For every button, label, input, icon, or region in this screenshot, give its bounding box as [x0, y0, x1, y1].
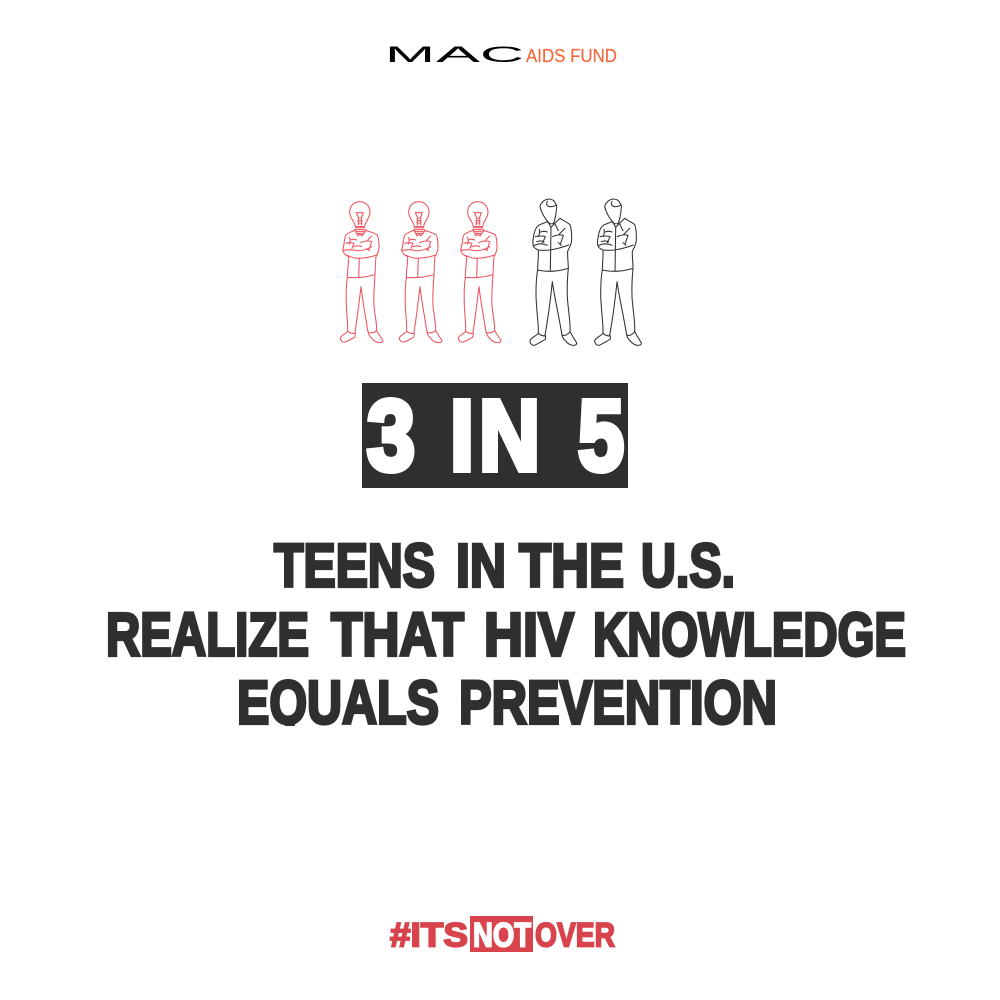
logo wordmark MAC: A — [436, 42, 481, 67]
logo wordmark MAC: M — [385, 42, 435, 67]
headline text — [108, 542, 906, 726]
stat word IN — [450, 380, 540, 492]
icon: lightbulb person 1 — [340, 202, 383, 343]
headline line 1 — [274, 531, 735, 599]
headline line 1: U.S. — [641, 531, 735, 599]
hashtag highlight box — [470, 916, 533, 952]
hashtag text NOT: NOT — [473, 916, 531, 954]
headline line 2: THAT — [331, 600, 464, 668]
headline line 2: KNOWLEDGE — [593, 600, 906, 668]
headline line 3: PREVENTION — [459, 668, 777, 736]
logo wordmark MAC: C — [480, 42, 524, 67]
big stat: 3 in 5 — [362, 380, 628, 492]
stat word IN: I — [450, 380, 474, 492]
hashtag: #ITSNOTOVER — [390, 916, 615, 954]
stat background box — [362, 383, 628, 488]
headline line 2: REALIZE — [106, 600, 309, 668]
headline line 1: TEENS — [274, 531, 435, 599]
headline line 3: EQUALS — [237, 668, 439, 736]
icon: person 4 — [530, 199, 577, 345]
stat number 5: 5 — [578, 380, 624, 492]
icon: person 5 — [595, 199, 641, 345]
logo wordmark MAC — [385, 42, 524, 67]
logo: MAC AIDS Fund — [385, 42, 617, 67]
logo text AIDS FUND: AIDS FUND — [526, 45, 617, 66]
headline line 1: THE — [519, 531, 624, 599]
stat word IN: N — [479, 380, 540, 492]
headline line 2 — [106, 600, 906, 668]
icon: lightbulb person 2 — [399, 202, 442, 343]
pictogram row: 3 of 5 people — [340, 199, 641, 345]
stat number 3: 3 — [367, 380, 415, 492]
hashtag text OVER: OVER — [535, 916, 615, 954]
headline line 1: IN — [456, 531, 506, 599]
headline line 2: HIV — [484, 600, 574, 668]
icon: lightbulb person 3 — [458, 202, 501, 343]
hashtag text ITS: #ITS — [390, 916, 468, 954]
headline line 3 — [238, 678, 775, 726]
